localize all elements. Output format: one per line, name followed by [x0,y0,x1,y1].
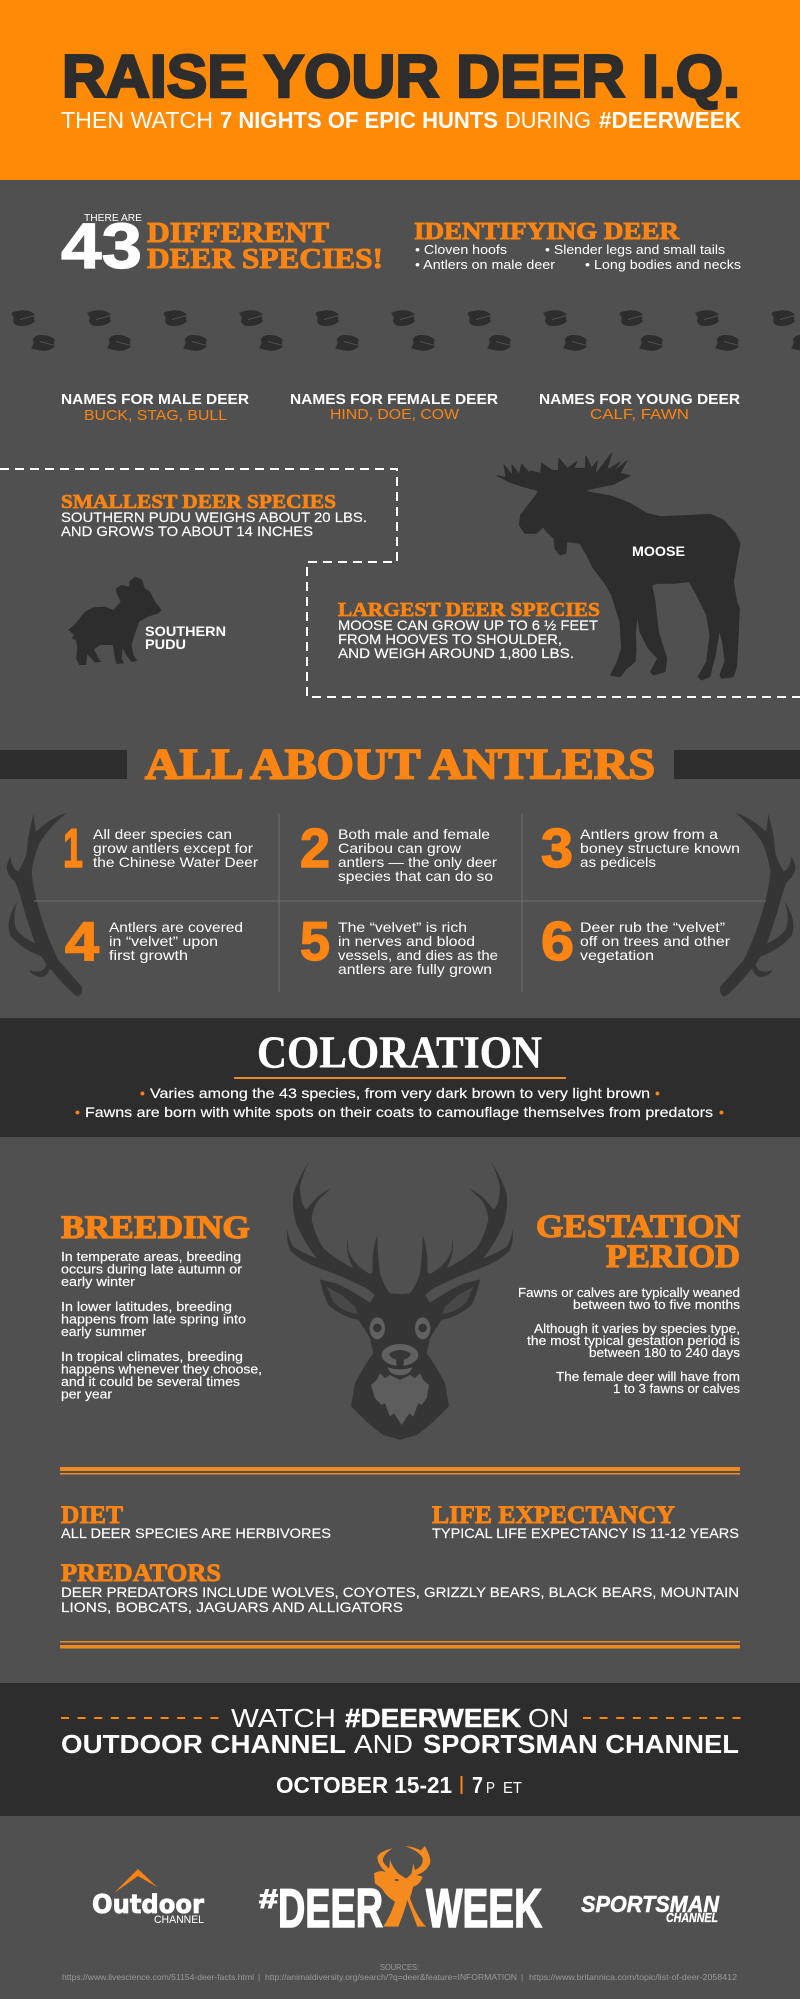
breeding: In tropical climates, breeding [61,1349,243,1364]
logo: deer week: DEER [278,1877,383,1939]
beard [371,1373,429,1425]
breeding: In lower latitudes, breeding [61,1299,232,1314]
antler fact 6: Deer rub the “velvet” [580,919,725,935]
antler fact 1: 1 [63,817,83,879]
logo: deer week: WEEK [426,1877,542,1939]
breeding [61,1210,262,1402]
life expectancy [432,1502,739,1541]
names for young deer [539,391,740,423]
gestation period: GESTATION [536,1209,740,1245]
identifying deer: • Slender legs and small tails [545,242,726,257]
gestation period: PERIOD [606,1239,740,1275]
names for female deer [290,391,498,423]
ears inner [327,1287,473,1314]
breeding: BREEDING [61,1210,250,1246]
antler fact 5: in nerves and blood [338,933,475,949]
identifying deer: IDENTIFYING DEER [414,219,680,245]
antler fact 3 [541,817,740,879]
antler fact 6: 6 [541,910,574,972]
icon: southern pudu silhouette [68,577,162,665]
largest deer species: LARGEST DEER SPECIES [338,600,600,621]
section heading: all about antlers: ALL ABOUT ANTLERS [145,742,655,788]
logo: deer week: # [259,1884,278,1914]
breeding: happens from late spring into [61,1312,246,1326]
antler fact 6: off on trees and other [580,933,730,949]
sources: | [521,1972,523,1982]
antler fact 2: Both male and female [338,826,490,842]
antler fact 6: vegetation [580,947,654,963]
southern pudu label [145,623,226,652]
gestation period: 1 to 3 fawns or calves [613,1381,740,1396]
antler fact 1: All deer species can [93,826,232,842]
antler fact 2: species that can do so [338,868,493,884]
breeding: occurs during late autumn or [61,1262,243,1276]
species count: DEER SPECIES! [147,244,383,275]
gestation period: the most typical gestation period is [527,1333,741,1348]
species count: 43 [61,210,142,282]
channels line: OUTDOOR CHANNEL [61,1729,346,1759]
coloration band [0,1018,800,1137]
largest deer species: FROM HOOVES TO SHOULDER, [338,631,562,647]
coloration fact 1: • [140,1085,145,1101]
subtitle: DURING [505,107,591,133]
icon: deer head [287,1157,513,1440]
coloration heading: COLORATION [257,1026,542,1078]
predators [61,1560,739,1615]
icon: moose silhouette [497,453,740,680]
antler fact 3: 3 [541,817,573,879]
predators: LIONS, BOBCATS, JAGUARS AND ALLIGATORS [61,1599,403,1615]
names for female deer: HIND, DOE, COW [330,406,460,423]
identifying deer [414,219,742,272]
eyes [370,1317,430,1339]
sources: https://www.britannica.com/topic/list-of-deer-2058412 [529,1972,737,1982]
channels line: SPORTSMAN CHANNEL [423,1729,739,1759]
breeding: happens whenever they choose, [61,1362,262,1376]
gestation period: Fawns or calves are typically weaned [518,1285,740,1300]
logo: sportsman channel: CHANNEL [666,1910,718,1925]
names for male deer: BUCK, STAG, BULL [84,407,227,424]
nose [382,1344,418,1375]
antler fact 2 [300,817,497,884]
names for female deer: NAMES FOR FEMALE DEER [290,391,498,408]
antler fact 1: grow antlers except for [93,840,253,856]
diet [61,1502,331,1541]
antler fact 4: first growth [109,947,188,963]
antler fact 5: The “velvet” is rich [338,919,467,935]
subtitle: #DEERWEEK [599,107,741,133]
antler fact 1 [63,817,258,879]
antler fact 4: 4 [65,910,99,972]
smallest deer species [61,492,367,539]
dashed divider outline [0,469,800,697]
gestation period: between 180 to 240 days [589,1345,741,1360]
breeding: and it could be several times [61,1374,241,1389]
gestation period [518,1209,741,1396]
smallest deer species: AND GROWS TO ABOUT 14 INCHES [61,523,313,539]
largest deer species [338,600,600,661]
smallest deer species: SOUTHERN PUDU WEIGHS ABOUT 20 LBS. [61,509,367,525]
names for male deer [61,391,249,424]
section heading: all about antlers [0,742,800,788]
predators: DEER PREDATORS INCLUDE WOLVES, COYOTES, GRIZZLY BEARS, BLACK BEARS, MOUNTAIN [61,1584,739,1600]
antler fact 5: 5 [300,910,330,972]
subtitle: THEN WATCH [61,107,213,133]
gestation period: between two to five months [573,1297,741,1312]
logo: outdoor channel: Outdoor [92,1890,204,1920]
sources: | [258,1972,260,1982]
sources: https://www.livescience.com/51154-deer-facts.html [62,1972,254,1982]
air date: 7 [472,1772,483,1798]
coloration fact 1: Varies among the 43 species, from very dark brown to very light brown [150,1085,650,1101]
watch line: ON [528,1703,569,1733]
breeding: early summer [61,1324,147,1339]
gestation period: Although it varies by species type, [534,1321,740,1336]
logo: sportsman channel: SPORTSMAN [581,1891,719,1917]
identifying deer: • Cloven hoofs [415,242,508,257]
antler fact 4: Antlers are covered [109,919,243,935]
antler fact 3: Antlers grow from a [580,826,718,842]
air date: OCTOBER 15-21 [276,1772,452,1798]
species count: DIFFERENT [147,218,329,249]
title: RAISE YOUR DEER I.Q. [62,43,740,110]
names for male deer: NAMES FOR MALE DEER [61,391,249,408]
coloration fact 2: • [75,1104,80,1120]
coloration fact 2: Fawns are born with white spots on their coats to camouflage themselves from predators [85,1104,713,1120]
logo: deer week [259,1846,542,1939]
species count [61,210,383,282]
logo: outdoor channel [92,1869,204,1926]
subtitle [61,107,741,133]
southern pudu label: SOUTHERN [145,623,226,639]
coloration fact 1: • [655,1085,660,1101]
antler fact 1: the Chinese Water Deer [93,854,258,870]
breeding: In temperate areas, breeding [61,1249,241,1264]
names for young deer: CALF, FAWN [590,406,689,423]
watch line [231,1703,569,1733]
life expectancy: LIFE EXPECTANCY [432,1502,675,1529]
hoof prints [11,310,800,351]
watch line: #DEERWEEK [345,1703,521,1733]
antler fact 5 [300,910,498,977]
antler fact 6 [541,910,730,972]
breeding: early winter [61,1274,136,1289]
largest deer species: AND WEIGH AROUND 1,800 LBS. [338,645,574,661]
gestation period: The female deer will have from [556,1369,740,1384]
antler fact 2: antlers — the only deer [338,854,497,870]
sources: http://animaldiversity.org/search/?q=deer&feature=INFORMATION [265,1972,517,1982]
diet: DIET [61,1502,123,1529]
breeding: per year [61,1386,113,1402]
antler fact 5: vessels, and dies as the [338,947,498,963]
identifying deer: • Long bodies and necks [585,257,742,272]
antler fact 2: Caribou can grow [338,840,462,856]
antler fact 3: as pedicels [580,854,656,870]
air date: P [486,1780,495,1797]
largest deer species: MOOSE CAN GROW UP TO 6 ½ FEET [338,617,598,633]
life expectancy: TYPICAL LIFE EXPECTANCY IS 11-12 YEARS [432,1525,739,1541]
antler fact 3: boney structure known [580,840,740,856]
watch line: WATCH [231,1703,336,1733]
predators: PREDATORS [61,1560,221,1587]
antler fact 5: antlers are fully grown [338,961,492,977]
icon: left antler [7,813,82,997]
southern pudu label: PUDU [145,636,186,652]
watch band [0,1683,800,1816]
antler fact 4: in “velvet” upon [109,933,218,949]
air date: ET [503,1780,522,1797]
sources: SOURCES: [380,1962,419,1972]
names for young deer: NAMES FOR YOUNG DEER [539,391,740,408]
diet: ALL DEER SPECIES ARE HERBIVORES [61,1525,331,1541]
logo: outdoor channel: CHANNEL [154,1914,204,1926]
moose label: MOOSE [632,543,685,559]
smallest deer species: SMALLEST DEER SPECIES [61,492,336,513]
subtitle: 7 NIGHTS OF EPIC HUNTS [220,107,498,133]
icon: right antler [720,813,795,997]
antler fact 4 [65,910,243,972]
sources [62,1962,737,1982]
channels line [61,1729,739,1759]
species count: THERE ARE [84,212,142,224]
deer mark [374,1846,430,1927]
channels line: AND [354,1729,413,1759]
identifying deer: • Antlers on male deer [415,257,556,272]
coloration fact 2: • [719,1104,724,1120]
header band [0,0,800,180]
antler fact 2: 2 [300,817,330,879]
